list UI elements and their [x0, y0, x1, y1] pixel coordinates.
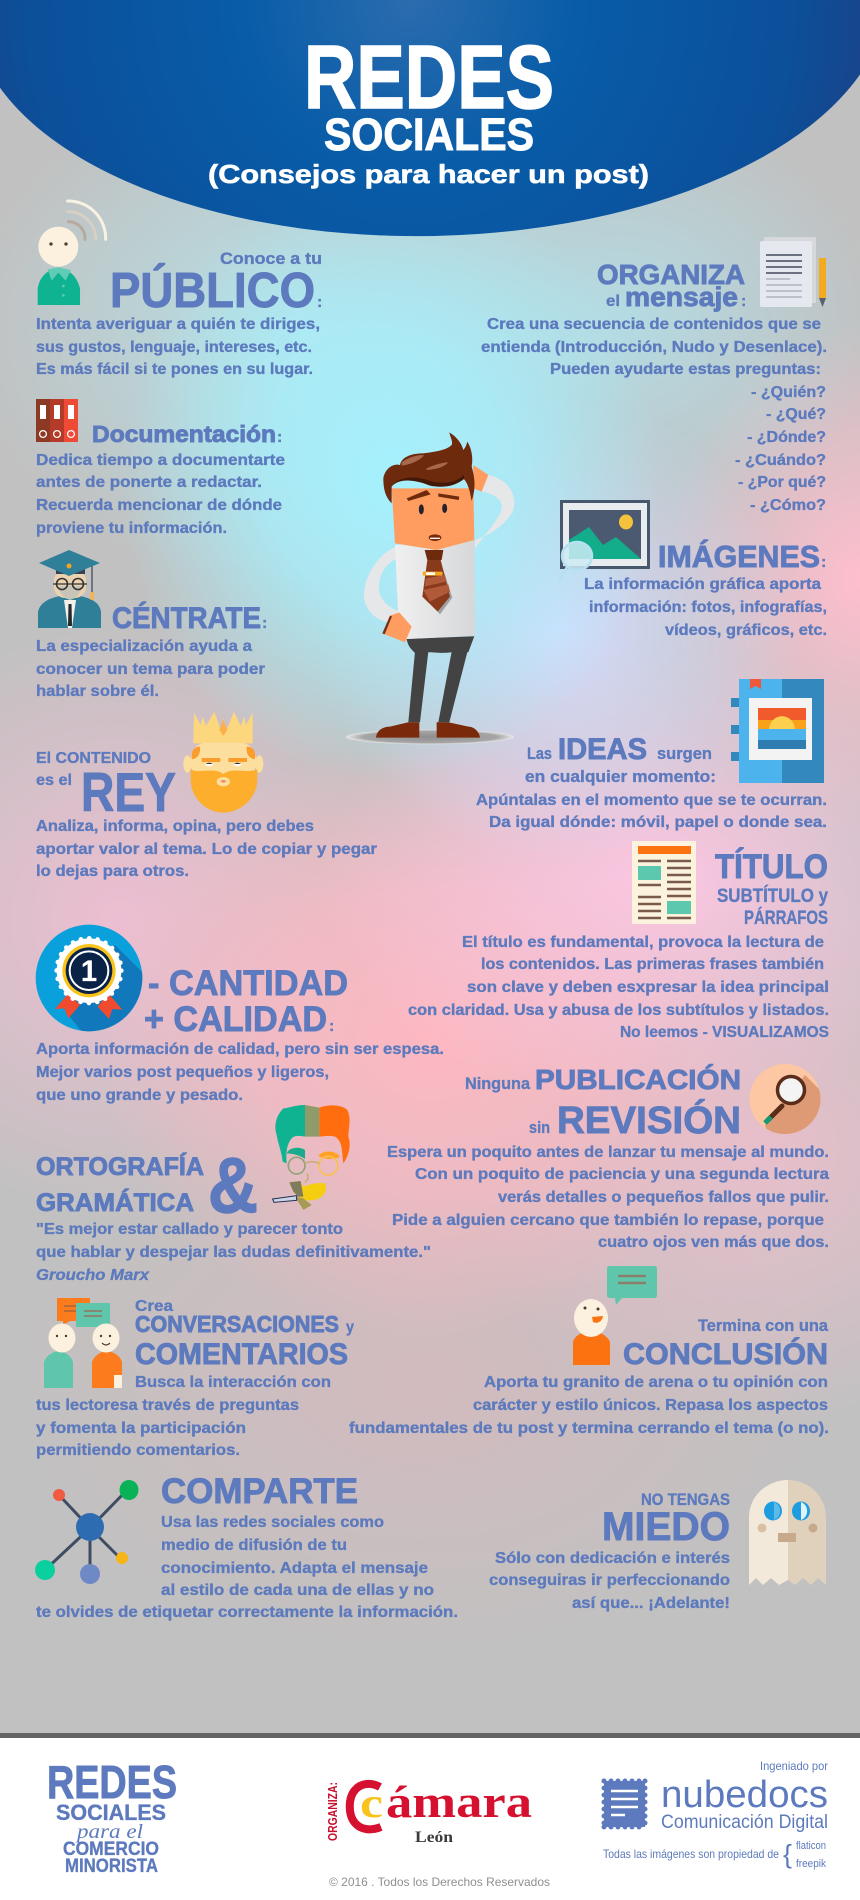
text block: conversaciones: y fomenta la participación: [36, 1420, 246, 1437]
credit: ingeniado por nubedocs: [603, 1759, 828, 1870]
footer logo: redes sociales para el comercio minorista: REDES: [47, 1756, 177, 1808]
text block: calidad: [36, 1041, 444, 1104]
text block: miedo: así que... ¡Adelante!: [572, 1595, 730, 1612]
panel: cantidad y calidad: [36, 925, 444, 1104]
text block: organiza: [481, 316, 827, 514]
heading: conversaciones y comentarios: Crea: [135, 1298, 173, 1315]
text block: organiza: - ¿Cómo?: [750, 497, 826, 514]
organizer logo: cámara león: ámara: [386, 1776, 532, 1827]
copyright: © 2016 . Todos los Derechos Reservados: [329, 1875, 550, 1889]
credit: ingeniado por nubedocs: {: [783, 1839, 792, 1869]
text block: organiza: - ¿Quién?: [751, 384, 826, 401]
heading: céntrate: CÉNTRATE: [112, 601, 261, 635]
panel: documentación: [36, 399, 285, 537]
credit: ingeniado por nubedocs: Todas las imágenes son propiedad de: [603, 1847, 779, 1861]
text block: rey: aportar valor al tema. Lo de copiar y pegar: [36, 841, 377, 858]
text block: rey: [36, 818, 377, 880]
heading: ideas: surgen: [657, 744, 712, 763]
panel: céntrate: [36, 550, 267, 700]
text block: conversaciones: [36, 1374, 331, 1459]
text block: título: No leemos - VISUALIZAMOS: [620, 1024, 829, 1041]
heading: publicación revisión: Ninguna: [465, 1074, 531, 1093]
text block: cita groucho marx: que hablar y despejar las dudas definitivamente.": [36, 1244, 431, 1261]
icon: ghost: [749, 1480, 826, 1585]
heading: ideas: en cualquier momento:: [525, 767, 716, 786]
text block: calidad: Mejor varios post pequeños y ligeros,: [36, 1064, 329, 1081]
heading: cantidad calidad: [144, 964, 348, 1039]
heading: ideas: [525, 733, 716, 786]
organizer logo: cámara león: c: [360, 1781, 383, 1827]
title: [208, 28, 649, 189]
heading: ortografía y gramática: [36, 1141, 258, 1229]
footer logo: redes sociales para el comercio minorista: COMERCIO: [63, 1839, 159, 1860]
footer logo: redes sociales para el comercio minorista: para el: [75, 1821, 144, 1843]
text block: organiza: - ¿Por qué?: [738, 474, 826, 491]
heading: público: :: [317, 294, 322, 311]
heading: publicación revisión: REVISIÓN: [557, 1098, 741, 1142]
text block: ideas: Da igual dónde: móvil, papel o donde sea.: [489, 814, 827, 831]
text block: rey: Analiza, informa, opina, pero debes: [36, 818, 314, 835]
text block: comparte: al estilo de cada una de ellas y no: [161, 1582, 434, 1599]
text block: imágenes: vídeos, gráficos, etc.: [665, 622, 827, 639]
icon: notebook: [731, 679, 824, 783]
text block: ideas: [476, 792, 827, 831]
heading: conclusión: CONCLUSIÓN: [623, 1337, 828, 1371]
credit: ingeniado por nubedocs: Comunicación Digital: [661, 1812, 828, 1833]
text block: conversaciones: tus lectoresa través de preguntas: [36, 1397, 299, 1414]
panel: el contenido es el rey: [36, 712, 377, 880]
text block: calidad: Aporta información de calidad, pero sin ser espesa.: [36, 1041, 444, 1058]
icon: groucho portrait: [273, 1105, 350, 1210]
text block: comparte: te olvides de etiquetar correctamente la información.: [36, 1604, 458, 1621]
heading: título: PÁRRAFOS: [744, 907, 828, 929]
heading: rey: es el: [36, 772, 72, 789]
text block: céntrate: hablar sobre él.: [36, 683, 159, 700]
panel: imágenes: [558, 500, 827, 639]
heading: ortografía y gramática: ORTOGRAFÍA: [36, 1152, 204, 1181]
heading: organiza el mensaje: :: [741, 293, 746, 310]
panel: ideas: [476, 679, 827, 831]
icon: graduate: [38, 550, 101, 628]
text block: imágenes: [584, 576, 827, 639]
icon: newspaper: [632, 841, 696, 924]
text block: revisión: Pide a alguien cercano que también lo repase, porque: [392, 1212, 824, 1229]
footer logo: redes sociales para el comercio minorista: [47, 1756, 177, 1877]
text block: organiza: Pueden ayudarte estas preguntas:: [550, 361, 821, 378]
heading: céntrate: :: [262, 615, 267, 632]
text block: revisión: cuatro ojos ven más que dos.: [598, 1234, 829, 1251]
icon: medal badge: [36, 924, 142, 1032]
title: REDES: [304, 28, 554, 128]
panel: publicación y revisión: [387, 1064, 835, 1251]
heading: organiza el mensaje: mensaje: [625, 282, 738, 312]
text block: organiza: - ¿Cuándo?: [735, 452, 826, 469]
text block: cita groucho marx: Groucho Marx: [36, 1267, 150, 1284]
text block: documentación: antes de ponerte a redactar.: [36, 474, 262, 491]
header banner: [0, 0, 860, 246]
organizer logo: cámara león: [326, 1776, 532, 1846]
text block: revisión: [387, 1144, 829, 1251]
text block: documentación: Dedica tiempo a documentarte: [36, 452, 285, 469]
heading: conclusión: [623, 1316, 829, 1371]
heading: cantidad calidad: + CALIDAD: [144, 1000, 327, 1039]
heading: rey: REY: [81, 761, 176, 823]
heading: publicación revisión: sin: [529, 1118, 550, 1137]
heading: ortografía y gramática: &: [208, 1141, 258, 1229]
heading: ideas: Las: [527, 744, 552, 763]
heading: publicación revisión: [465, 1064, 741, 1142]
icon: medal badge: 1: [81, 955, 97, 988]
heading: imágenes: IMÁGENES: [658, 539, 820, 574]
text block: céntrate: [36, 638, 265, 700]
panel: conclusión: [349, 1266, 829, 1437]
text block: imágenes: La información gráfica aporta: [584, 576, 821, 593]
panel: ortografía y gramática: [36, 1105, 431, 1284]
heading: ideas: IDEAS: [558, 733, 647, 766]
credit: ingeniado por nubedocs: Ingeniado por: [760, 1759, 828, 1773]
footer logo: redes sociales para el comercio minorista: MINORISTA: [65, 1856, 158, 1877]
text block: título: [408, 934, 829, 1041]
panel: no tengas miedo: [489, 1480, 826, 1612]
credit: ingeniado por nubedocs: freepik: [796, 1858, 826, 1870]
text block: céntrate: conocer un tema para poder: [36, 661, 265, 678]
panel: conoce a tu público: [36, 201, 322, 378]
heading: rey: El CONTENIDO: [36, 750, 151, 767]
text block: conclusión: Aporta tu granito de arena o tu opinión con: [484, 1374, 828, 1391]
heading: título: TÍTULO: [715, 848, 828, 886]
text block: céntrate: La especialización ayuda a: [36, 638, 252, 655]
organizer logo: cámara león: ORGANIZA:: [326, 1782, 340, 1841]
text block: título: son clave y deben esxpresar la idea principal: [467, 979, 829, 996]
text block: imágenes: información: fotos, infografías,: [589, 599, 827, 616]
icon: person with signal: [38, 201, 106, 305]
footer logo: redes sociales para el comercio minorista: SOCIALES: [56, 1800, 166, 1825]
heading: título: [715, 848, 828, 929]
heading: documentación: :: [277, 429, 282, 446]
text block: calidad: que uno grande y pesado.: [36, 1087, 243, 1104]
text block: conclusión: [349, 1374, 829, 1437]
text block: revisión: verás detalles o pequeños fallos que pulir.: [498, 1189, 829, 1206]
panel: conversaciones y comentarios: [36, 1298, 354, 1459]
title: SOCIALES: [324, 109, 534, 160]
icon: person with speech bubble: [573, 1266, 657, 1365]
text block: miedo: Sólo con dedicación e interés: [495, 1550, 730, 1567]
text block: título: con claridad. Usa y abusa de los subtítulos y listados.: [408, 1002, 829, 1019]
text block: miedo: [489, 1550, 730, 1612]
text block: conclusión: carácter y estilo únicos. Repasa los aspectos: [473, 1397, 828, 1414]
heading: público: PÚBLICO: [110, 263, 315, 318]
text block: comparte: [36, 1514, 458, 1621]
text block: miedo: conseguiras ir perfeccionando: [489, 1572, 730, 1589]
heading: documentación: Documentación: [92, 421, 276, 447]
heading: público: Conoce a tu: [220, 249, 322, 268]
footer panel: [0, 1733, 860, 1900]
heading: título: SUBTÍTULO y: [717, 885, 828, 907]
text block: título: los contenidos. Las primeras frases también: [481, 956, 824, 973]
text block: organiza: entienda (Introducción, Nudo y Desenlace).: [481, 339, 827, 356]
text block: público: Intenta averiguar a quién te diriges,: [36, 316, 320, 333]
text block: conclusión: fundamentales de tu post y termina cerrando el tema (o no).: [349, 1420, 829, 1437]
text block: conversaciones: permitiendo comentarios.: [36, 1442, 240, 1459]
heading: publicación revisión: PUBLICACIÓN: [535, 1064, 741, 1095]
text block: público: Es más fácil si te pones en su lugar.: [36, 361, 313, 378]
text block: comparte: medio de difusión de tu: [161, 1537, 347, 1554]
text block: revisión: Con un poquito de paciencia y una segunda lectura: [415, 1166, 829, 1183]
text block: ideas: Apúntalas en el momento que se te ocurran.: [476, 792, 827, 809]
icon: two people talking: [44, 1298, 122, 1388]
text block: comparte: conocimiento. Adapta el mensaje: [161, 1560, 428, 1577]
heading: miedo: NO TENGAS: [641, 1490, 730, 1509]
heading: miedo: MIEDO: [602, 1505, 730, 1549]
icon: document and pencil: [760, 237, 826, 307]
credit: ingeniado por nubedocs: nubedocs: [661, 1774, 828, 1816]
panel: organiza el mensaje: [481, 237, 827, 514]
heading: conversaciones y comentarios: y: [346, 1319, 354, 1336]
text block: rey: lo dejas para otros.: [36, 863, 189, 880]
heading: ortografía y gramática: GRAMÁTICA: [36, 1188, 194, 1217]
heading: cantidad calidad: - CANTIDAD: [148, 964, 348, 1003]
heading: rey: [36, 750, 176, 823]
icon: red folders: [36, 399, 78, 442]
text block: organiza: Crea una secuencia de contenidos que se: [487, 316, 821, 333]
heading: imágenes: :: [821, 554, 826, 571]
heading: conversaciones y comentarios: [135, 1298, 354, 1371]
heading: cantidad calidad: :: [329, 1018, 334, 1035]
text block: revisión: Espera un poquito antes de lanzar tu mensaje al mundo.: [387, 1144, 829, 1161]
text block: público: sus gustos, lenguaje, intereses, etc.: [36, 339, 312, 356]
text block: documentación: proviene tu información.: [36, 520, 227, 537]
heading: organiza el mensaje: el: [606, 293, 620, 310]
organizer logo: cámara león: León: [415, 1829, 453, 1846]
icon: network nodes: [35, 1480, 138, 1584]
heading: conclusión: Termina con una: [698, 1316, 829, 1335]
text block: comparte: Usa las redes sociales como: [161, 1514, 384, 1531]
text block: documentación: Recuerda mencionar de dónde: [36, 497, 282, 514]
icon: bearded king: [183, 712, 263, 813]
text block: público: [36, 316, 320, 378]
text block: cita groucho marx: [36, 1221, 431, 1284]
panel: título subtítulo y párrafos: [408, 841, 829, 1041]
character: confused man: [346, 432, 514, 744]
icon: magnifying glass: [750, 1064, 820, 1134]
heading: organiza el mensaje: ORGANIZA: [597, 259, 745, 290]
text block: organiza: - ¿Qué?: [766, 406, 826, 423]
heading: conversaciones y comentarios: CONVERSACIONES: [135, 1311, 339, 1337]
credit: ingeniado por nubedocs: flaticon: [796, 1840, 826, 1852]
title: (Consejos para hacer un post): [208, 159, 649, 189]
heading: organiza el mensaje: [597, 259, 746, 312]
text block: conversaciones: Busca la interacción con: [135, 1374, 331, 1391]
text block: documentación: [36, 452, 285, 537]
text block: título: El título es fundamental, provoca la lectura de: [462, 934, 824, 951]
icon: framed picture with magnifier: [558, 500, 650, 583]
text block: cita groucho marx: "Es mejor estar callado y parecer tonto: [36, 1221, 343, 1238]
heading: comparte: COMPARTE: [161, 1472, 358, 1511]
heading: conversaciones y comentarios: COMENTARIOS: [135, 1338, 348, 1371]
panel: comparte: [35, 1472, 458, 1621]
text block: organiza: - ¿Dónde?: [747, 429, 826, 446]
